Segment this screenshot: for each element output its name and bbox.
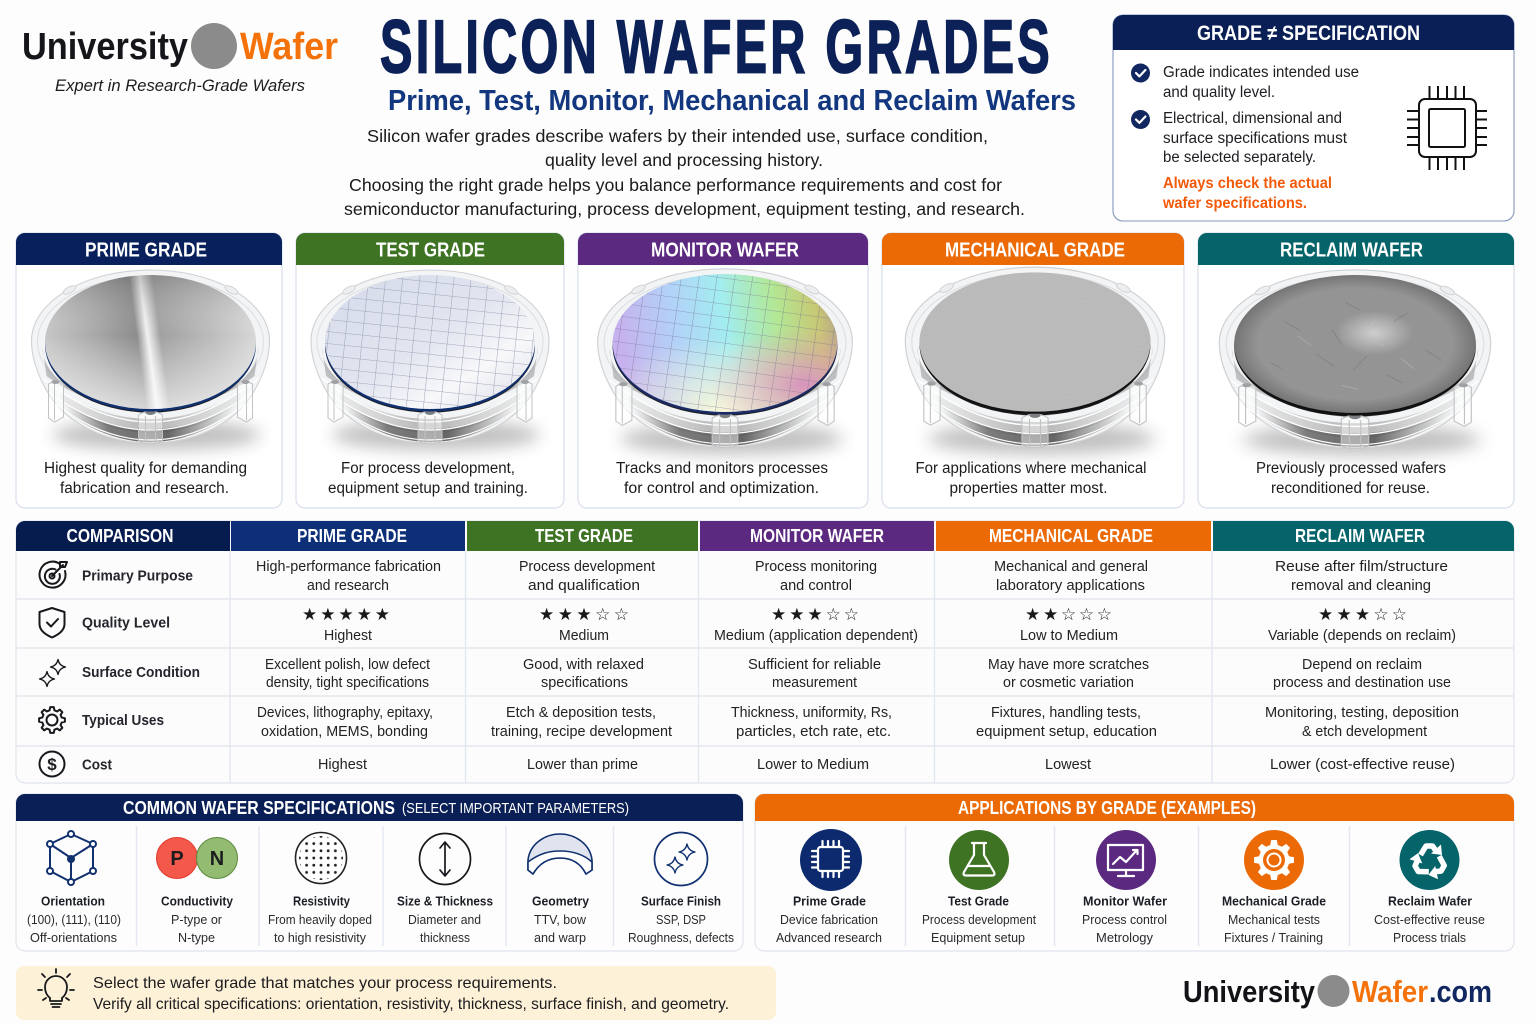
image: matte gray wafer in carrier [905, 267, 1165, 454]
panel: applications by grade: APPLICATIONS BY GRADE (EXAMPLES) [958, 798, 1256, 818]
icon: P N circles [156, 838, 238, 878]
panel: prime grade card: PRIME GRADE [85, 240, 207, 262]
logo: UniversityWafer: Expert in Research-Grade Wafers [55, 76, 305, 95]
row: quality level: Highest [324, 628, 372, 644]
row: typical uses: Monitoring, testing, deposition [1265, 705, 1459, 721]
icon: chip [1407, 86, 1487, 170]
icon: gear badge [1244, 830, 1304, 890]
panel: common wafer specifications: COMMON WAFER SPECIFICATIONS [123, 798, 395, 818]
panel: common wafer specifications: (SELECT IMPORTANT PARAMETERS) [402, 801, 629, 817]
spec: conductivity: Conductivity [161, 894, 234, 908]
panel: test grade card [296, 233, 564, 508]
icon: bowed wafer [528, 834, 592, 874]
row: cost: Lower (cost-effective reuse) [1270, 757, 1455, 773]
row: primary purpose: High-performance fabrication [256, 559, 441, 575]
icon: light bulb [38, 969, 74, 1007]
spec: geometry: TTV, bow [534, 913, 587, 927]
row: quality level: Medium [559, 628, 609, 644]
row: surface condition: Surface Condition [82, 665, 200, 681]
row: quality level: Variable (depends on reclaim) [1268, 628, 1456, 644]
comparison table [16, 521, 1514, 783]
panel: grade vs specification: GRADE ≠ SPECIFICATION [1197, 22, 1420, 45]
intro text block: semiconductor manufacturing, process development, equipment testing, and research. [344, 199, 1025, 219]
text: grade notes: Grade indicates intended use [1163, 64, 1359, 81]
text: monitor description [616, 460, 828, 497]
icon: monitor chart badge [1096, 830, 1156, 890]
row: typical uses: Typical Uses [82, 713, 164, 729]
row: cost: Cost [82, 758, 112, 774]
text: mechanical description: properties matter most. [950, 480, 1108, 497]
table header row: RECLAIM WAFER [1295, 526, 1425, 546]
application: reclaim wafer: Process trials [1393, 931, 1466, 945]
application: test grade: Equipment setup [931, 931, 1025, 945]
icon: gray wafer disc [191, 23, 237, 69]
table header row: PRIME GRADE [297, 526, 407, 546]
application: mechanical grade [1222, 830, 1326, 945]
row: typical uses: training, recipe development [491, 724, 672, 740]
icon: doped dots circle [296, 832, 346, 884]
icon: dollar [40, 752, 64, 776]
spec: surface finish: SSP, DSP [656, 913, 706, 927]
row: typical uses: Thickness, uniformity, Rs, [731, 705, 892, 721]
spec: orientation: (100), (111), (110) [27, 913, 121, 927]
icon: target [40, 562, 67, 588]
intro text block: quality level and processing history. [545, 150, 823, 170]
row: cost: Lowest [1045, 757, 1091, 773]
text: reclaim description: Previously processed wafers [1256, 460, 1446, 477]
application: test grade: Test Grade [948, 894, 1009, 908]
row: typical uses: Devices, lithography, epitaxy, [257, 705, 433, 721]
spec: resistivity: to high resistivity [274, 931, 367, 945]
panel: grade vs specification [1113, 15, 1514, 221]
spec: orientation: Off-orientations [30, 931, 117, 945]
row: quality level: ★★★☆☆ [1318, 605, 1407, 625]
panel: mechanical grade card [882, 233, 1184, 508]
icon: shield [40, 608, 64, 638]
text: test description: equipment setup and training. [328, 480, 528, 497]
application: monitor wafer: Process control [1082, 913, 1167, 927]
spec: surface finish: Surface Finish [641, 894, 721, 908]
panel: prime grade card [16, 233, 282, 508]
spec: size and thickness: Diameter and [408, 913, 481, 927]
callout: selection tip: Verify all critical specifications: orientation, resistivity, thickness, surface finish, and geometry. [93, 996, 729, 1013]
row: surface condition [40, 657, 1451, 691]
footer logo: UniversityWafer.com: .com [1429, 974, 1492, 1009]
text: grade notes: Electrical, dimensional and [1163, 110, 1342, 127]
row: cost: Highest [318, 757, 367, 773]
spec: orientation [27, 831, 121, 945]
panel: applications by grade [755, 794, 1514, 951]
row: primary purpose: and control [780, 578, 852, 594]
row: surface condition: or cosmetic variation [1003, 675, 1134, 691]
icon: gear [39, 707, 65, 733]
spec: resistivity: Resistivity [293, 894, 351, 908]
spec: geometry: and warp [534, 931, 586, 945]
icon: crystal cube [47, 831, 96, 885]
row: primary purpose: and qualification [528, 578, 640, 594]
row: primary purpose: Reuse after film/structure [1275, 559, 1448, 575]
application: monitor wafer: Metrology [1096, 931, 1154, 945]
intro text block: Choosing the right grade helps you balance performance requirements and cost for [349, 175, 1002, 195]
spec: surface finish: Roughness, defects [628, 931, 734, 945]
row: quality level: ★★★☆☆ [771, 605, 859, 625]
icon: sparkle circle [654, 832, 708, 886]
text: prime description: Highest quality for demanding [44, 460, 247, 477]
table header row: COMPARISON [66, 526, 174, 546]
row: typical uses: particles, etch rate, etc. [736, 724, 891, 740]
text: grade notes: Always check the actual [1163, 175, 1332, 192]
footer logo: UniversityWafer.com: Wafer [1352, 974, 1428, 1009]
row: quality level: Low to Medium [1020, 628, 1118, 644]
row: quality level: ★★★★★ [302, 605, 390, 625]
text: prime description [44, 460, 247, 497]
subtitle: Prime, Test, Monitor, Mechanical and Reclaim Wafers [388, 85, 1076, 117]
table header row [16, 521, 1514, 551]
icon: P N circles: P [170, 848, 184, 870]
logo: UniversityWafer [22, 23, 338, 95]
row: typical uses [39, 705, 1459, 740]
text: grade notes: wafer specifications. [1162, 195, 1307, 212]
row: primary purpose: removal and cleaning [1291, 578, 1431, 594]
callout: selection tip [16, 966, 776, 1020]
spec: conductivity: P-type or [171, 913, 222, 927]
image: polished wafer in carrier [32, 270, 270, 450]
row: primary purpose [40, 559, 1448, 594]
spec: resistivity: From heavily doped [268, 913, 372, 927]
table header row: MECHANICAL GRADE [989, 526, 1153, 546]
row: cost: Lower to Medium [757, 757, 869, 773]
icon: check 2 [1131, 110, 1150, 129]
row: quality level: Quality Level [82, 616, 170, 632]
logo: UniversityWafer: University [22, 26, 188, 68]
callout: selection tip: Select the wafer grade that matches your process requirements. [93, 975, 557, 992]
row: primary purpose: and research [307, 578, 389, 594]
text: mechanical description: For applications where mechanical [916, 460, 1146, 477]
text: reclaim description: reconditioned for reuse. [1271, 480, 1430, 497]
footer logo: UniversityWafer.com: University [1183, 974, 1316, 1009]
application: monitor wafer: Monitor Wafer [1083, 894, 1167, 908]
text: grade notes: and quality level. [1163, 84, 1275, 101]
icon: chip badge [800, 829, 862, 891]
text: monitor description: Tracks and monitors processes [616, 460, 828, 477]
table header row: TEST GRADE [535, 526, 633, 546]
spec: conductivity: N-type [178, 931, 215, 945]
spec: geometry: Geometry [532, 894, 590, 908]
application: prime grade: Prime Grade [793, 894, 866, 908]
footer logo: UniversityWafer.com [1183, 974, 1492, 1009]
icon: double arrow circle [420, 834, 470, 884]
row: cost: Lower than prime [527, 757, 638, 773]
row: surface condition: Depend on reclaim [1302, 657, 1422, 673]
table header row: MONITOR WAFER [750, 526, 884, 546]
text: prime description: fabrication and research. [60, 480, 229, 497]
row: primary purpose: laboratory applications [996, 578, 1145, 594]
spec: orientation: Orientation [41, 894, 105, 908]
spec: surface finish [628, 832, 734, 945]
application: test grade [922, 830, 1036, 945]
application: mechanical grade: Mechanical tests [1228, 913, 1320, 927]
text: reclaim description [1256, 460, 1446, 497]
image: iridescent wafer in carrier [598, 269, 852, 454]
row: primary purpose: Mechanical and general [994, 559, 1148, 575]
text: monitor description: for control and optimization. [624, 480, 819, 497]
intro text block [344, 126, 1025, 219]
row: surface condition: measurement [772, 675, 857, 691]
icon: dollar: $ [47, 755, 57, 774]
application: monitor wafer [1082, 830, 1167, 945]
panel: test grade card: TEST GRADE [376, 240, 485, 262]
application: test grade: Process development [922, 913, 1036, 927]
spec: size and thickness: thickness [420, 931, 470, 945]
text: mechanical description [916, 460, 1146, 497]
intro text block: Silicon wafer grades describe wafers by their intended use, surface condition, [367, 126, 988, 146]
row: typical uses: equipment setup, education [976, 724, 1157, 740]
icon: P N circles: N [210, 848, 224, 870]
application: reclaim wafer: Reclaim Wafer [1388, 894, 1472, 908]
text: grade notes: surface specifications must [1163, 130, 1348, 147]
icon: sparkles [40, 660, 66, 686]
image: reclaimed wafer in carrier [1219, 270, 1491, 455]
row: primary purpose: Primary Purpose [82, 568, 193, 584]
row: surface condition: Sufficient for reliable [748, 657, 881, 673]
spec: resistivity [268, 832, 372, 945]
panel: reclaim wafer card: RECLAIM WAFER [1280, 240, 1423, 262]
text: test description: For process development, [341, 460, 515, 477]
row: primary purpose: Process monitoring [755, 559, 877, 575]
application: mechanical grade: Fixtures / Training [1224, 931, 1323, 945]
panel: common wafer specifications [16, 794, 743, 951]
spec: size and thickness: Size & Thickness [397, 894, 493, 908]
row: surface condition: density, tight specifications [266, 675, 429, 691]
row: typical uses: Etch & deposition tests, [506, 705, 656, 721]
row: typical uses: oxidation, MEMS, bonding [261, 724, 428, 740]
text: test description [328, 460, 528, 497]
row: surface condition: Good, with relaxed [523, 657, 644, 673]
row: surface condition: specifications [541, 675, 628, 691]
spec: geometry [528, 834, 592, 945]
icon: check 1 [1131, 64, 1150, 82]
row: surface condition: Excellent polish, low defect [265, 657, 430, 673]
row: cost [40, 752, 1455, 776]
panel: mechanical grade card: MECHANICAL GRADE [945, 240, 1125, 262]
row: typical uses: & etch development [1302, 724, 1427, 740]
application: prime grade [776, 829, 882, 945]
row: quality level: ★★☆☆☆ [1025, 605, 1112, 625]
row: quality level: Medium (application dependent) [714, 628, 918, 644]
icon: recycle badge [1400, 830, 1460, 890]
panel: monitor wafer card [578, 233, 868, 508]
application: prime grade: Advanced research [776, 931, 882, 945]
icon: flask badge [949, 830, 1009, 890]
row: primary purpose: Process development [519, 559, 655, 575]
application: reclaim wafer [1374, 830, 1485, 945]
text: grade notes [1162, 64, 1359, 212]
application: mechanical grade: Mechanical Grade [1222, 894, 1326, 908]
row: surface condition: process and destination use [1273, 675, 1451, 691]
row: quality level: ★★★☆☆ [539, 605, 629, 625]
logo: UniversityWafer: Wafer [240, 26, 338, 68]
application: reclaim wafer: Cost-effective reuse [1374, 913, 1485, 927]
application: prime grade: Device fabrication [780, 913, 878, 927]
row: quality level [40, 605, 1456, 644]
row: typical uses: Fixtures, handling tests, [991, 705, 1141, 721]
spec: size and thickness [397, 834, 493, 945]
panel: reclaim wafer card [1198, 233, 1514, 508]
spec: conductivity [156, 838, 238, 945]
image: patterned test wafer in carrier [311, 270, 549, 450]
text: grade notes: be selected separately. [1163, 149, 1316, 166]
row: surface condition: May have more scratches [988, 657, 1149, 673]
panel: monitor wafer card: MONITOR WAFER [651, 240, 799, 262]
title: SILICON WAFER GRADES [380, 4, 1053, 88]
